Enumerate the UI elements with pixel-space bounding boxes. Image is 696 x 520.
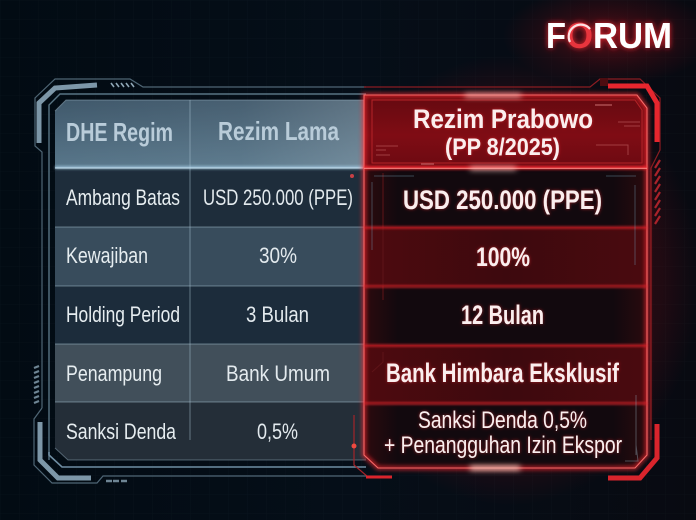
- logo: FORUM: [546, 15, 672, 56]
- row divider glows: [364, 94, 647, 470]
- logo letter O as swirl: O: [566, 15, 593, 56]
- logo: FORUM: F: [546, 15, 566, 56]
- value: 3 Bulan: 3 Bulan: [246, 302, 309, 327]
- value: 30%: 30%: [259, 243, 297, 268]
- heading: Rezim Prabowo: Rezim Prabowo: [413, 104, 593, 134]
- panel: Prabowo regime frame: [350, 79, 660, 478]
- table: Prabowo regime: [364, 94, 647, 470]
- table: old regime: [55, 100, 366, 460]
- value: USD 250.000 (PPE): USD 250.000 (PPE): [203, 185, 353, 210]
- glowing outline: [364, 95, 647, 468]
- row label: Kewajiban: Kewajiban: [66, 243, 148, 268]
- value: USD 250.000 (PPE): USD 250.000 (PPE): [403, 185, 602, 215]
- value: 0,5%: 0,5%: [257, 419, 298, 444]
- value: Bank Umum: Bank Umum: [226, 361, 330, 386]
- value: 12 Bulan: 12 Bulan: [461, 300, 544, 330]
- panel: old regime frame: [34, 79, 366, 483]
- HUD micro details: [372, 105, 640, 461]
- subheading: PP 8/2025: (PP 8/2025): [445, 134, 560, 161]
- logo: FORUM: RUM: [593, 15, 672, 56]
- value: Sanksi Denda 0,5%: Sanksi Denda 0,5%: [418, 407, 587, 434]
- value: 100%: 100%: [476, 242, 530, 272]
- row label: Sanksi Denda: Sanksi Denda: [66, 419, 176, 444]
- heading: Rezim Lama: Rezim Lama: [218, 116, 339, 146]
- value: + Penangguhan Izin Ekspor: + Penangguhan Izin Ekspor: [384, 432, 622, 459]
- table fills: [55, 100, 366, 460]
- row label: Holding Period: Holding Period: [66, 302, 180, 327]
- row label: Penampung: Penampung: [66, 361, 162, 386]
- value: Bank Himbara Eksklusif: Bank Himbara Eksklusif: [386, 358, 620, 388]
- row label: Ambang Batas: Ambang Batas: [66, 185, 180, 210]
- table fills: [364, 95, 647, 468]
- heading: DHE Regim: DHE Regim: [66, 117, 173, 147]
